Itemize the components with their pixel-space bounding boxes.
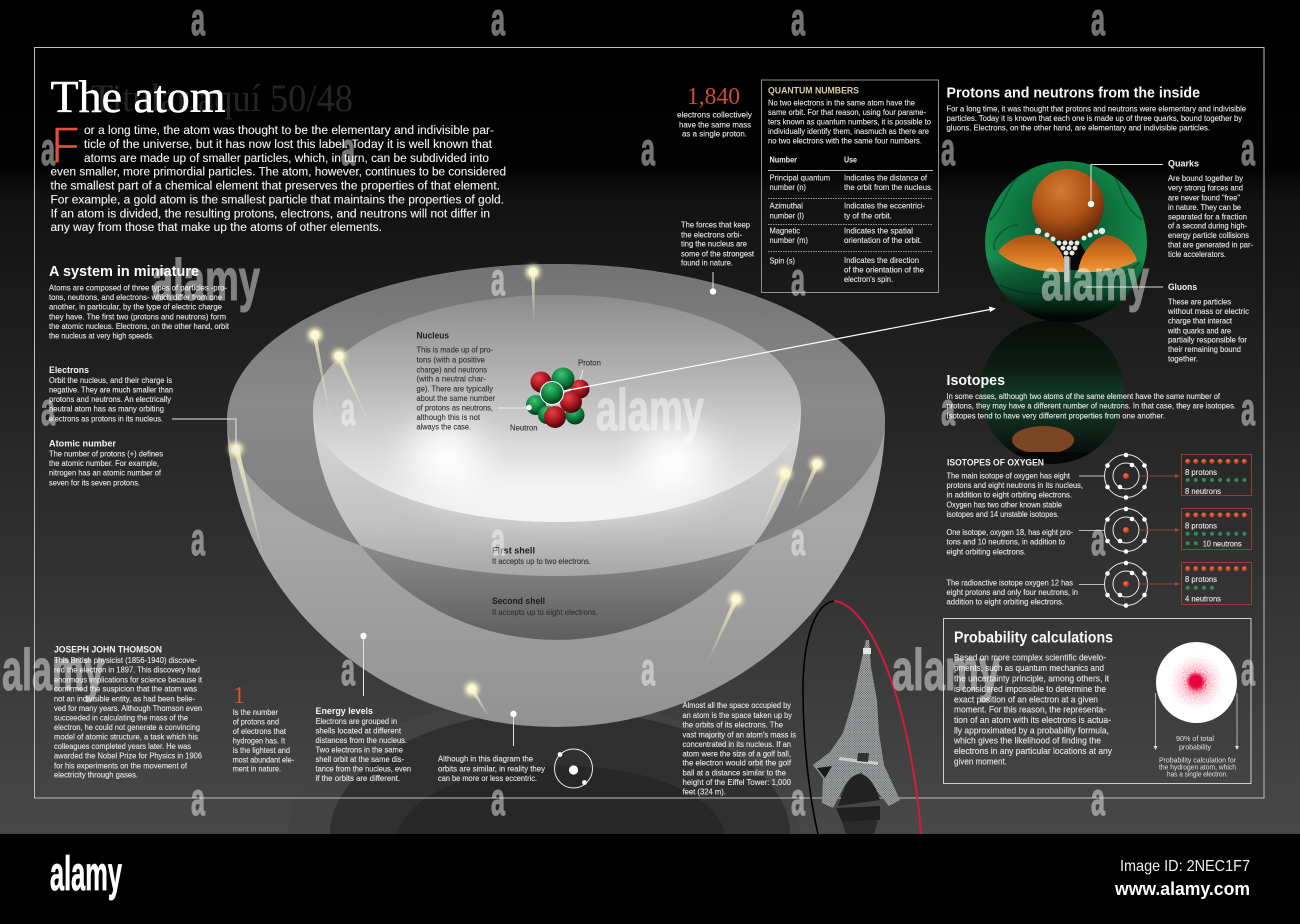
Thomson biography: enormous implications for science because it [54,674,203,684]
table: number (l) [770,210,804,220]
nucleus text: ge). There are typically [416,383,494,393]
panel: quantum numbers: individually identify them, inasmuch as there are [768,126,929,136]
Thomson biography: electricity through gases. [54,770,138,780]
orbit around Eiffel Tower [803,601,921,834]
table: ty of the orbit. [844,210,892,220]
Eiffel Tower [813,640,900,834]
forces text: The forces that keep [681,220,750,230]
fact: number 1 [233,683,294,774]
watermark overlay: a [491,253,505,305]
energy levels text [316,706,411,783]
watermark overlay: a [41,123,55,175]
isotope 3 box: 4 neutrons [1185,593,1221,603]
outer shell body [227,264,885,727]
stat: 1,840: as a single proton. [682,129,747,139]
isotopes heading: protons, they may have a different number of neutrons. In that case, they are isotopes. [946,401,1236,411]
table: orientation of the orbit. [844,235,922,245]
watermark overlay: a [791,513,805,565]
probability caption: 90% of total [1176,734,1214,743]
golf ball comparison text: an atom is the space taken up by [682,710,793,720]
probability caption: Probability calculation for [1159,756,1236,765]
isotopes of oxygen text: One isotope, oxygen 18, has eight pro- [946,527,1073,537]
table: the orbit from the nucleus. [844,182,933,192]
quarks callout: energy particle collisions [1168,230,1249,240]
watermark overlay: a [941,123,955,175]
Thomson biography: red the electron in 1897. This discovery had [54,665,200,675]
eccentric orbit text [438,754,546,783]
isotope 3 box: 8 protons [1185,574,1217,584]
quarks callout: ticle accelerators. [1168,249,1226,259]
fact: number 1: of electrons that [233,726,287,736]
probability caption: has a single electron. [1167,770,1228,779]
watermark overlay: a [491,513,505,565]
watermark overlay: a [641,123,655,175]
panel: quantum numbers: no two electrons with the same four numbers. [768,135,922,145]
electrons text [49,365,173,423]
probability cloud [1156,642,1237,723]
table: Principal quantum [770,172,830,182]
isotope 1 box: 8 neutrons [1185,486,1221,496]
golf ball comparison text: vast majority of an atom's mass is [682,729,796,739]
isotopes of oxygen text: The main isotope of oxygen has eight [946,470,1071,480]
intro text with drop cap: or a long time, the atom was thought to be the elementary and indivisible par- [84,123,494,137]
golf ball comparison text: atom were the size of a golf ball, [682,748,791,758]
quarks callout: in nature. They can be [1168,202,1241,212]
golf ball comparison text [682,700,796,796]
energy levels text: if the orbits are different. [316,773,400,783]
quarks callout: separated for a fraction [1168,211,1247,221]
intro text with drop cap: even smaller, more primordial particles. The atom, however, continues to be considered [50,165,506,179]
forces text: ting the nucleus are [681,239,747,249]
electrons with trails [229,265,824,722]
watermark overlay: a [791,773,805,825]
isotopes of oxygen text: in addition to eight orbiting electrons. [946,490,1072,500]
isotopes of oxygen text: addition to eight orbiting electrons. [946,597,1064,607]
electrons text: protons and neutrons. An electrically [49,394,172,404]
isotope 2 box: 8 protons [1185,520,1217,530]
probability extent arrows [1156,693,1237,746]
protons and neutrons heading [946,84,1246,133]
fact: number 1: Is the number [233,707,278,717]
fact: number 1: of protons and [233,716,279,726]
isotopes heading: Isotopes tend to have very different properties from one another. [946,410,1165,420]
image id: Image ID: 2NEC1F7 [1120,858,1250,875]
quarks callout [1088,159,1253,259]
isotopes of oxygen text: ISOTOPES OF OXYGEN [947,458,1044,468]
electrons text: Electrons [49,365,89,376]
golf ball comparison text: the electron would orbit the golf [682,758,792,768]
watermark overlay: a [491,773,505,825]
nucleus text: always the case. [416,421,471,431]
panel: quantum numbers: ters known as quantum numbers, it is possible to [768,117,931,127]
panel: quantum numbers [762,80,938,292]
panel: probability calculations: electrons in any particular locations at any [954,746,1112,756]
golf ball comparison text: ball at a distance similar to the [682,767,786,777]
protons and neutrons heading: Protons and neutrons from the inside [946,84,1200,101]
table: electron's spin. [844,274,893,284]
neutron and proton leaders [498,370,583,408]
isotopes heading: In some cases, although two atoms of the same element have the same number of [946,391,1221,401]
isotope 3 box [1140,562,1252,604]
isotope 3: oxygen 12 atom [1079,561,1148,608]
atomic number text: the atomic number. For example, [49,458,159,468]
electrons text: neutral atom has as many orbiting [49,404,164,414]
inner shell opening [313,295,801,522]
first shell label: First shell [492,546,535,556]
atomic number text: Atomic number [49,439,116,450]
fact: number 1: ment in nature. [233,764,281,774]
probability caption: probability [1179,742,1211,751]
isotopes of oxygen text: isotopes and 14 unstable isotopes. [946,509,1059,519]
intro text with drop cap: ticle of the universe, but it has now lost this label. Today it is well known that [84,137,493,151]
watermark overlay: a [41,383,55,435]
outer shell rim [227,264,885,576]
inner shell upper part [313,410,801,576]
intro text with drop cap: the smallest part of a chemical element that preserves the properties of that element. [50,179,500,193]
section: a system in miniature: another, in particular, by the type of electric charge [49,302,222,312]
panel: probability calculations: given moment. [954,756,1007,766]
panel: probability calculations: is considered impossible to determine the [954,684,1106,694]
isotope 1 box: 8 protons [1185,467,1217,477]
icon: eccentric orbit [554,749,592,788]
gluons [1035,228,1105,282]
fact: number 1: 1 [233,683,245,709]
isotopes heading [946,372,1236,420]
table: number (n) [770,182,806,192]
table: Number [770,154,798,164]
website: www.alamy.com [1114,879,1250,899]
stat: 1,840 [677,84,753,139]
arrow: nucleus to proton detail [564,306,996,391]
electrons text: Orbit the nucleus, and their charge is [49,375,172,385]
energy levels text: Energy levels [316,706,373,717]
dark sphere shadow under bowl [288,700,800,834]
panel: probability calculations: moment. For this reason, the representa- [954,705,1106,715]
intro text with drop cap: atoms are made up of smaller particles, which, in turn, can be subdivided into [84,151,489,165]
nucleus text: of protons as neutrons, [416,403,493,413]
inner shell lower part [313,408,801,640]
atomic number text: seven for its seven protons. [49,477,140,487]
gluons callout: their remaining bound [1168,344,1241,354]
gluons callout: Gluons [1168,282,1197,293]
watermark overlay: a [341,383,355,435]
footer logo: alamy [50,848,122,901]
table: Indicates the spatial [844,225,913,235]
watermark overlay: alamy [152,248,260,313]
protons and neutrons heading: gluons. Electrons, on the other hand, are elementary and indivisible particles. [946,123,1210,133]
nucleus text: (with a neutral char- [416,374,486,384]
table: Use [844,154,857,164]
watermark overlay: a [1241,383,1255,435]
isotopes of oxygen text: protons and eight neutrons in its nucleus, [946,480,1083,490]
second shell label: Second shell [492,596,545,607]
energy levels text: Two electrons in the same [316,745,403,755]
nucleus text: This is made up of pro- [416,345,493,355]
quarks callout: that are generated in par- [1168,239,1253,249]
eccentric orbit leader [510,711,517,746]
atomic number text: The number of protons (+) defines [49,449,163,459]
forces leader [710,272,716,295]
watermark overlay: a [341,643,355,695]
energy levels text: shell orbit at the same dis- [316,754,404,764]
ghost placeholder heading: Titular aquí 50/48 [91,77,353,120]
isotopes of oxygen text: tons and 10 neutrons, in addition to [946,537,1065,547]
electron leader line [172,419,239,451]
panel: probability calculations: the uncertainty principle, among others, it [954,674,1109,684]
watermark overlay: a [341,123,355,175]
panel: quantum numbers: same orbit. For that reason, using four parame- [768,107,926,117]
watermark overlay: a [641,643,655,695]
forces text [681,220,755,268]
gluons callout: without mass or electric [1167,306,1250,316]
Thomson biography: for his experiments on the movement of [54,760,188,770]
watermark overlay: alamy [2,638,104,703]
isotope 1: oxygen 16 atom [1079,453,1148,500]
golf ball comparison text: concentrated in its nucleus. If an [682,739,791,749]
table: of the orientation of the [844,265,924,275]
watermark overlay: a [1241,643,1255,695]
isotopes of oxygen text [946,458,1083,607]
golf ball comparison text: the orbits of its electrons. The [682,720,783,730]
watermark overlay: a [191,513,205,565]
gluons callout: partially responsible for [1168,335,1247,345]
title: The atom [50,72,226,122]
neutron label: Neutron [510,423,538,433]
Thomson biography: model of atomic structure, a task which his [54,732,198,742]
table: Indicates the direction [844,255,919,265]
nucleus cluster [526,368,590,428]
isotopes of oxygen text: The radioactive isotope oxygen 12 has [946,577,1073,587]
Thomson biography: colleagues completed years later. He was [54,741,191,751]
fact: number 1: is the lightest and [233,745,290,755]
energy levels leader [360,633,367,696]
energy levels text: distances from the nucleus. [316,735,407,745]
panel: probability calculations: pments, such as quantum mechanics and [954,663,1104,673]
quarks callout: very strong forces and [1168,183,1243,193]
quarks callout: Are bound together by [1168,173,1244,183]
isotopes of oxygen text: eight protons and only four neutrons, in [946,587,1078,597]
energy levels text: Electrons are grouped in [316,716,397,726]
section: a system in miniature: tons, neutrons, and electrons- which differ from one [49,292,222,302]
section: a system in miniature: A system in miniature [49,263,199,280]
fact: number 1: hydrogen has. It [233,735,286,745]
panel: quantum numbers: No two electrons in the same atom have the [768,97,915,107]
atomic number text [49,439,163,487]
Thomson biography: JOSEPH JOHN THOMSON [54,645,162,655]
neutron marker [526,405,532,410]
first shell label [492,546,591,566]
gluons callout: with quarks and are [1167,325,1231,335]
section: a system in miniature [49,263,230,340]
intro text with drop cap: If an atom is divided, the resulting protons, electrons, and neutrons will not differ in [50,206,490,220]
isotope 2: oxygen 18 atom [1079,507,1148,554]
golf ball comparison text: feet (324 m). [682,786,726,796]
protons and neutrons heading: particles. Today it is known that each one is made up of three quarks, bound together by [946,113,1243,123]
Thomson biography: not an indivisible entity, as had been belie- [54,693,195,703]
nucleus text: Nucleus [416,331,449,342]
panel: probability calculations: which gives the likelihood of finding the [953,736,1101,746]
section: a system in miniature: they have. The first two (protons and neutrons) form [49,311,226,321]
watermark overlay: a [1091,513,1105,565]
nucleus text: although this is not [416,412,481,422]
proton label: Proton [578,358,601,368]
watermark overlay: a [1091,773,1105,825]
forces text: the electrons orbi- [681,229,742,239]
nucleus text: about the same number [416,393,495,403]
panel: probability calculations: Based on more complex scientific develo- [954,653,1106,663]
gluons callout: charge that interact [1168,316,1233,326]
Thomson biography: awarded the Nobel Prize for Physics in 1906 [54,751,202,761]
gluons callout: together. [1168,354,1198,364]
watermark overlay: alamy [892,638,1000,703]
panel: probability calculations: exact position of an electron at a given [954,694,1098,704]
golf ball comparison text: Almost all the space occupied by [682,700,792,710]
table: Spin (s) [770,255,795,265]
intro text with drop cap [50,117,506,234]
golf ball comparison text: height of the Eiffel Tower: 1,000 [682,777,791,787]
forces text: some of the strongest [681,248,755,258]
forces text: found in nature. [681,258,733,268]
electrons text: negative. They are much smaller than [49,384,173,394]
panel: probability calculations: Probability calculations [954,630,1113,647]
eccentric orbit text: Although in this diagram the [438,754,533,764]
Thomson biography: succeeded in calculating the mass of the [54,712,188,722]
isotopes of oxygen text: eight orbiting electrons. [946,546,1026,556]
quarks callout: of a second during high- [1168,221,1247,231]
second shell label [492,596,598,617]
panel: quantum numbers: QUANTUM NUMBERS [768,85,859,95]
energy levels text: shells located at different [316,725,402,735]
table [768,154,933,284]
reflection of proton sphere [980,320,1130,466]
intro text with drop cap: any way from those that make up the atoms of other elements. [50,220,382,234]
protons and neutrons heading: For a long time, it was thought that protons and neutrons were elementary and indivisible [946,104,1246,114]
quarks callout: Quarks [1168,159,1199,170]
Thomson biography: This British physicist (1856-1940) discove- [54,655,197,665]
panel: probability calculations [944,618,1251,784]
section: a system in miniature: the nucleus at very high speeds. [49,330,154,340]
isotope 1 box [1140,454,1252,496]
eccentric orbit text: orbits are similar, in reality they [438,763,546,773]
stat: 1,840: electrons collectively [677,110,753,120]
first shell label: It accepts up to two electrons. [492,556,591,566]
panel: probability calculations: tion of an atom with its electrons is actua- [954,715,1111,725]
bowl diagram: electron shells [227,264,885,727]
frame [34,48,1264,798]
Thomson biography: ved for many years. Although Thomson even [54,703,202,713]
inner glow [407,424,713,514]
probability caption [1159,734,1236,779]
isotopes heading: Isotopes [946,372,1005,389]
table: Indicates the eccentrici- [844,201,925,211]
stat: 1,840: have the same mass [679,119,751,129]
table: Azimuthal [770,201,803,211]
second shell label: It accepts up to eight electrons. [492,607,598,617]
isotopes of oxygen text: Oxygen has two other known stable [946,499,1062,509]
watermark overlay: alamy [1041,248,1149,313]
fact: number 1: most abundant ele- [233,754,294,764]
table: number (m) [770,235,808,245]
eccentric orbit text: can be more or less eccentric. [438,773,537,783]
quarks callout: are never found "free" [1168,192,1240,202]
watermark overlay: a [1241,123,1255,175]
isotope 2 box: 10 neutrons [1203,539,1242,549]
Thomson biography: electron, he could not generate a convincing [54,722,200,732]
atomic number text: nitrogen has an atomic number of [49,468,162,478]
gluons callout [1083,282,1250,364]
intro text with drop cap: For example, a gold atom is the smallest particle that maintains the properties of gold. [50,192,504,206]
nucleus text [416,331,495,431]
arrow heads [1154,746,1239,750]
panel: probability calculations: lly approximated by a probability formula, [954,725,1109,735]
energy levels text: tance from the nucleus, even [316,764,411,774]
watermark overlay: a [791,253,805,305]
watermark overlay: a [941,383,955,435]
table: Indicates the distance of [844,172,928,182]
section: a system in miniature: the atomic nucleus. Electrons, on the other hand, orbit [49,321,230,331]
probability caption: the hydrogen atom, which [1159,763,1236,772]
drop cap: F [51,117,80,175]
watermark overlay: alamy [596,378,704,443]
gluons callout: These are particles [1168,296,1231,306]
Thomson biography: confirmed the suspicion that the atom was [54,684,197,694]
watermark overlay: a [191,773,205,825]
stat: 1,840: 1,840 [687,84,740,110]
table: Magnetic [770,225,801,235]
electrons text: electrons as protons in its nucleus. [49,413,163,423]
section: a system in miniature: Atoms are composed of three types of particles -pro- [49,283,227,293]
Thomson biography [54,645,203,780]
nucleus text: tons (with a positive [416,354,485,364]
proton sphere with quarks and gluons [985,161,1147,323]
nucleus text: charge) and neutrons [416,364,487,374]
quarks [998,169,1137,272]
footer bar [0,834,1300,924]
isotope 2 box [1140,508,1252,550]
